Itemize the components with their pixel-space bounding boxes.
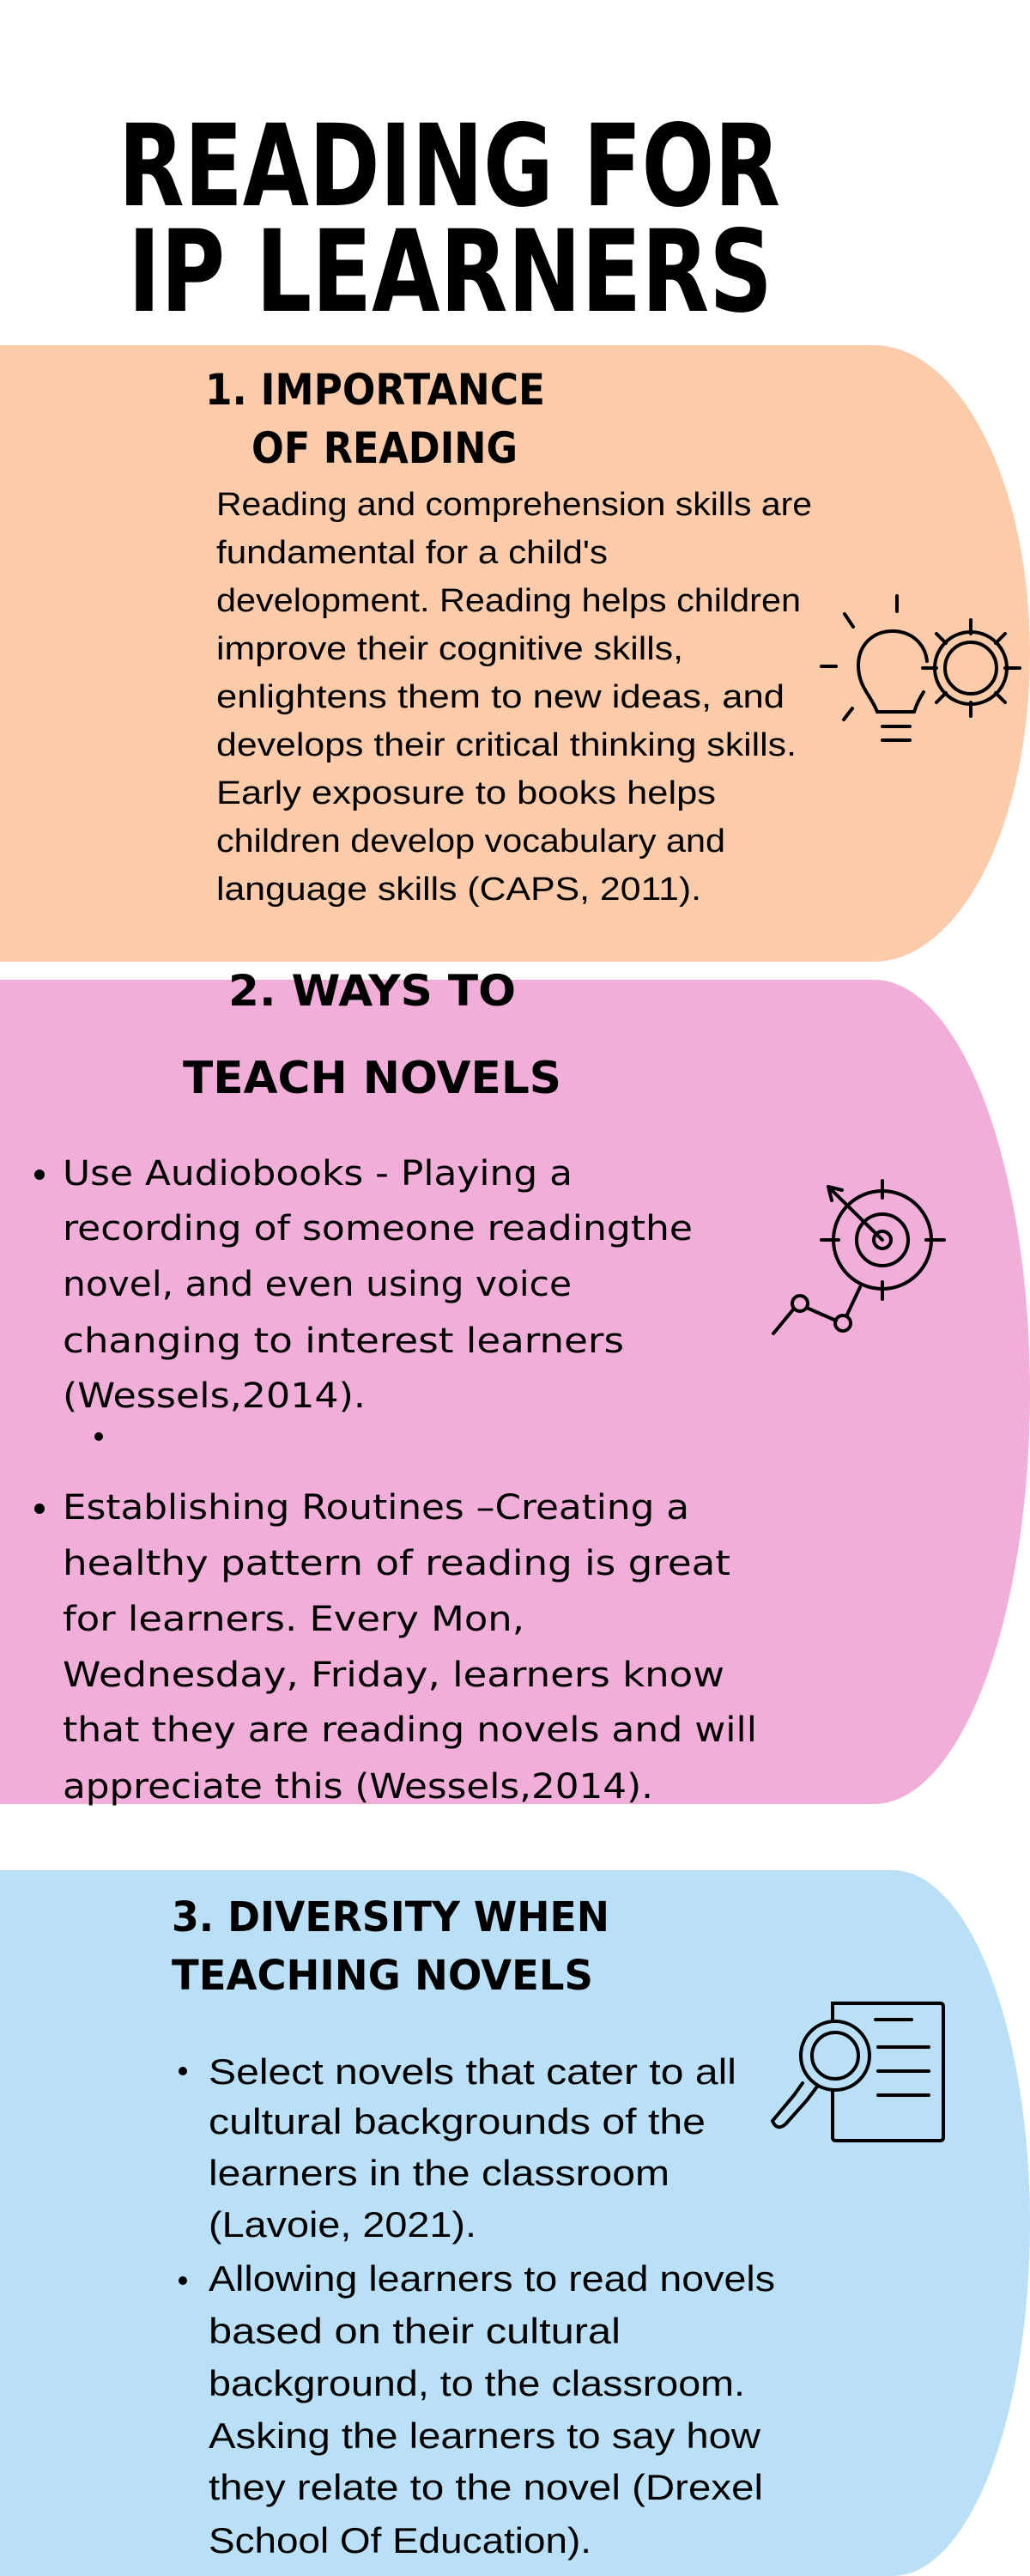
icon: target: [773, 1181, 944, 1334]
title: READING FOR: [118, 100, 780, 233]
text block: importance: language skills (CAPS, 2011).: [216, 872, 701, 908]
text block: importance: children develop vocabulary and: [216, 823, 725, 860]
bullet: select novels: (Lavoie, 2021).: [209, 2204, 476, 2245]
bullet: allowing learners: based on their cultural: [209, 2311, 621, 2351]
text block: importance: improve their cognitive skills,: [216, 631, 683, 667]
heading: ways to teach novels: TEACH NOVELS: [183, 1053, 561, 1104]
panel: importance of reading: [0, 345, 1030, 962]
heading: diversity: TEACHING NOVELS: [172, 1952, 593, 2000]
heading: importance of reading: OF READING: [251, 423, 518, 473]
bullet: select novels: [179, 2051, 736, 2245]
bullet: audiobooks: [34, 1154, 693, 1441]
title: IP LEARNERS: [128, 206, 772, 338]
text block: importance: Early exposure to books helps: [216, 775, 716, 811]
bullet: allowing learners: Asking the learners to say how: [209, 2415, 761, 2456]
bullet: routines: healthy pattern of reading is great: [63, 1544, 730, 1583]
icon: document with magnifier: [772, 2003, 943, 2141]
bullet: routines: for learners. Every Mon,: [63, 1600, 524, 1639]
text block: importance: fundamental for a child's: [216, 535, 608, 571]
text block: importance: develops their critical thinking skills.: [216, 727, 797, 763]
bullet: allowing learners: [179, 2258, 775, 2561]
bullet: audiobooks: novel, and even using voice: [63, 1265, 572, 1304]
bullet: audiobooks: Use Audiobooks - Playing a: [63, 1154, 573, 1194]
bullet: routines: Wednesday, Friday, learners know: [63, 1656, 724, 1695]
heading: ways to teach novels: 2. WAYS TO: [228, 966, 516, 1016]
heading: diversity: 3. DIVERSITY WHEN: [172, 1893, 609, 1941]
bullet: allowing learners: background, to the classroom.: [209, 2363, 745, 2403]
bullet: audiobooks: recording of someone readingthe: [63, 1209, 693, 1249]
text block: importance: [216, 487, 812, 908]
bullet: allowing learners: School Of Education).: [209, 2520, 591, 2561]
title: [118, 100, 780, 338]
text block: importance: Reading and comprehension skills are: [216, 487, 812, 523]
icon: lightbulb and gear: [821, 596, 1020, 740]
bullet: routines: [34, 1488, 757, 1807]
bullet: select novels: learners in the classroom: [209, 2153, 670, 2193]
bullet: allowing learners: they relate to the novel (Drexel: [209, 2467, 763, 2507]
panel: ways to teach novels: [0, 966, 1030, 1807]
bullet: select novels: Select novels that cater to all: [209, 2051, 736, 2092]
bullet: routines: appreciate this (Wessels,2014).: [63, 1767, 653, 1807]
bullet: routines: that they are reading novels and will: [63, 1710, 757, 1750]
bullet: audiobooks: (Wessels,2014).: [63, 1376, 366, 1416]
bullet: select novels: cultural backgrounds of the: [209, 2101, 706, 2142]
heading: importance of reading: 1. IMPORTANCE: [205, 365, 545, 415]
text block: importance: enlightens them to new ideas, and: [216, 679, 785, 715]
heading: diversity: [172, 1893, 609, 2000]
panel: diversity: [0, 1870, 1030, 2576]
bullet: allowing learners: Allowing learners to read novels: [209, 2258, 775, 2299]
bullet: audiobooks: changing to interest learners: [63, 1321, 624, 1361]
text block: importance: development. Reading helps children: [216, 583, 801, 619]
heading: importance of reading: [205, 365, 545, 473]
heading: ways to teach novels: [183, 966, 561, 1104]
bullet: routines: Establishing Routines –Creating a: [63, 1488, 689, 1528]
